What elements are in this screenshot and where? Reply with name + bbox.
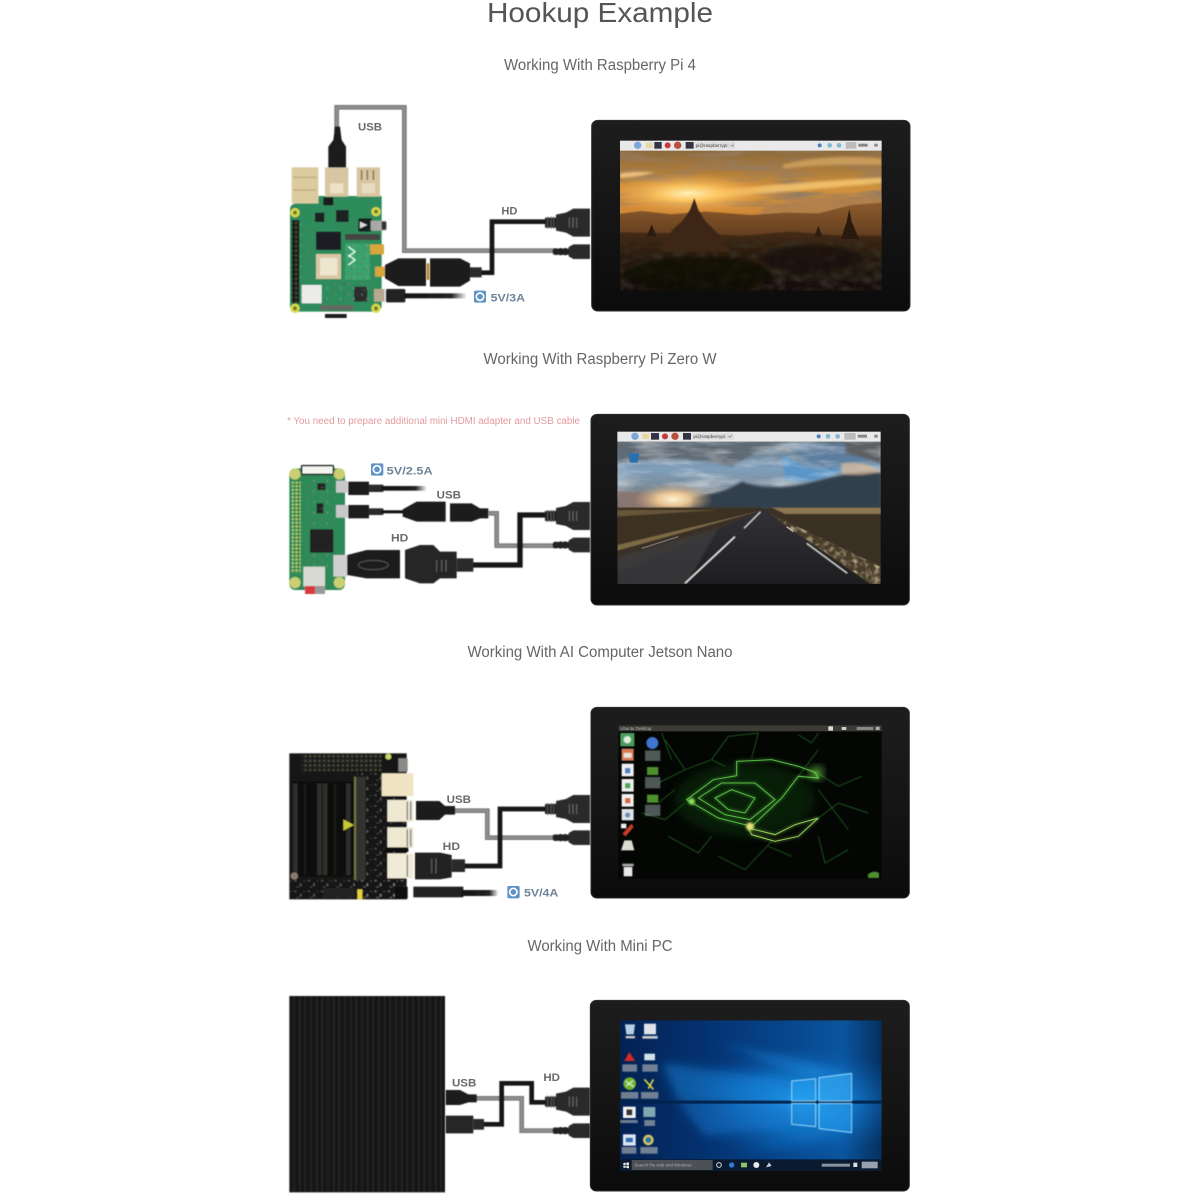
panel: Raspberry Pi 4 connection (290, 107, 590, 318)
desktop icons (645, 737, 660, 816)
windows taskbar: Search the web and Windows (634, 1163, 692, 1168)
USB label: USB (358, 121, 382, 133)
HDMI adapter (385, 258, 482, 287)
power plug and cable (413, 887, 498, 897)
Raspberry Pi Zero board (289, 466, 348, 594)
panel: Mini PC connection (289, 996, 590, 1192)
monitor connectors (545, 1088, 590, 1138)
monitor connectors (545, 795, 590, 845)
power plug and cable (348, 482, 427, 495)
power icon (507, 886, 520, 898)
HDMI cable (463, 809, 547, 866)
bezel (591, 414, 909, 605)
desktop icons (620, 1024, 658, 1154)
monitor: Mini PC (590, 1000, 915, 1191)
monitor: Raspberry Pi 4 (592, 120, 910, 311)
panel: Jetson Nano connection (289, 753, 590, 900)
heading: Raspberry Pi 4: Working With Raspberry Pi 4 (504, 57, 696, 74)
nvidia wallpaper (618, 725, 882, 879)
bezel (591, 707, 909, 898)
windows taskbar (620, 1159, 882, 1171)
monitor: Raspberry Pi Zero W (591, 414, 909, 605)
power icon (474, 291, 486, 303)
top bar (618, 725, 882, 731)
bezel (592, 120, 910, 311)
HDMI cable (480, 222, 547, 273)
monitor connectors (545, 209, 590, 259)
heading: Raspberry Pi Zero W: Working With Raspberry Pi Zero W (484, 351, 717, 368)
USB cable (475, 1098, 557, 1131)
bezel (590, 1000, 909, 1191)
HDMI cable (482, 1083, 547, 1124)
USB cable (453, 811, 557, 838)
HDMI adapter (347, 545, 473, 583)
note: additional adapter required: * You need to prepare additional mini HDMI adapter and USB cable (287, 416, 580, 427)
USB plug (446, 1090, 477, 1105)
power icon (371, 463, 383, 476)
power label: 5V/2.5A (387, 466, 433, 478)
sunset wallpaper (620, 150, 882, 290)
USB adapter (348, 502, 488, 522)
HDMI plug (415, 853, 465, 879)
heading: Jetson Nano: Working With AI Computer Jetson Nano (468, 644, 732, 661)
USB plug (328, 127, 346, 167)
HD label: HD (501, 205, 518, 217)
HD label: HD (391, 532, 409, 544)
mini PC box (289, 996, 445, 1192)
power cable (386, 289, 467, 302)
Jetson Nano board (289, 753, 413, 899)
desktop taskbar (620, 141, 882, 151)
desktop taskbar: pi@raspberrypi: ~/ (696, 143, 735, 148)
USB cable (488, 513, 557, 546)
USB label: USB (447, 794, 471, 806)
Raspberry Pi 4 board (290, 167, 386, 318)
USB label: USB (452, 1078, 476, 1090)
windows wallpaper (620, 1020, 882, 1160)
road wallpaper (615, 442, 885, 587)
HDMI cable (472, 515, 547, 565)
top bar: Ubuntu Desktop (620, 726, 652, 731)
launcher icons (620, 733, 634, 876)
heading: Mini PC: Working With Mini PC (528, 938, 672, 955)
USB plug (416, 801, 455, 820)
HDMI plug (446, 1116, 484, 1133)
USB label: USB (437, 489, 461, 501)
panel: Raspberry Pi Zero W connection (289, 463, 590, 594)
power label: 5V/4A (524, 888, 558, 900)
icon: trash (628, 453, 639, 463)
monitor: Jetson Nano (591, 707, 909, 898)
monitor connectors (545, 502, 590, 552)
power label: 5V/3A (491, 293, 525, 305)
desktop taskbar (617, 432, 881, 442)
HD label: HD (543, 1072, 560, 1084)
HD label: HD (443, 841, 460, 853)
USB cable (337, 107, 557, 251)
desktop taskbar: pi@raspberrypi: ~/ (693, 434, 732, 439)
